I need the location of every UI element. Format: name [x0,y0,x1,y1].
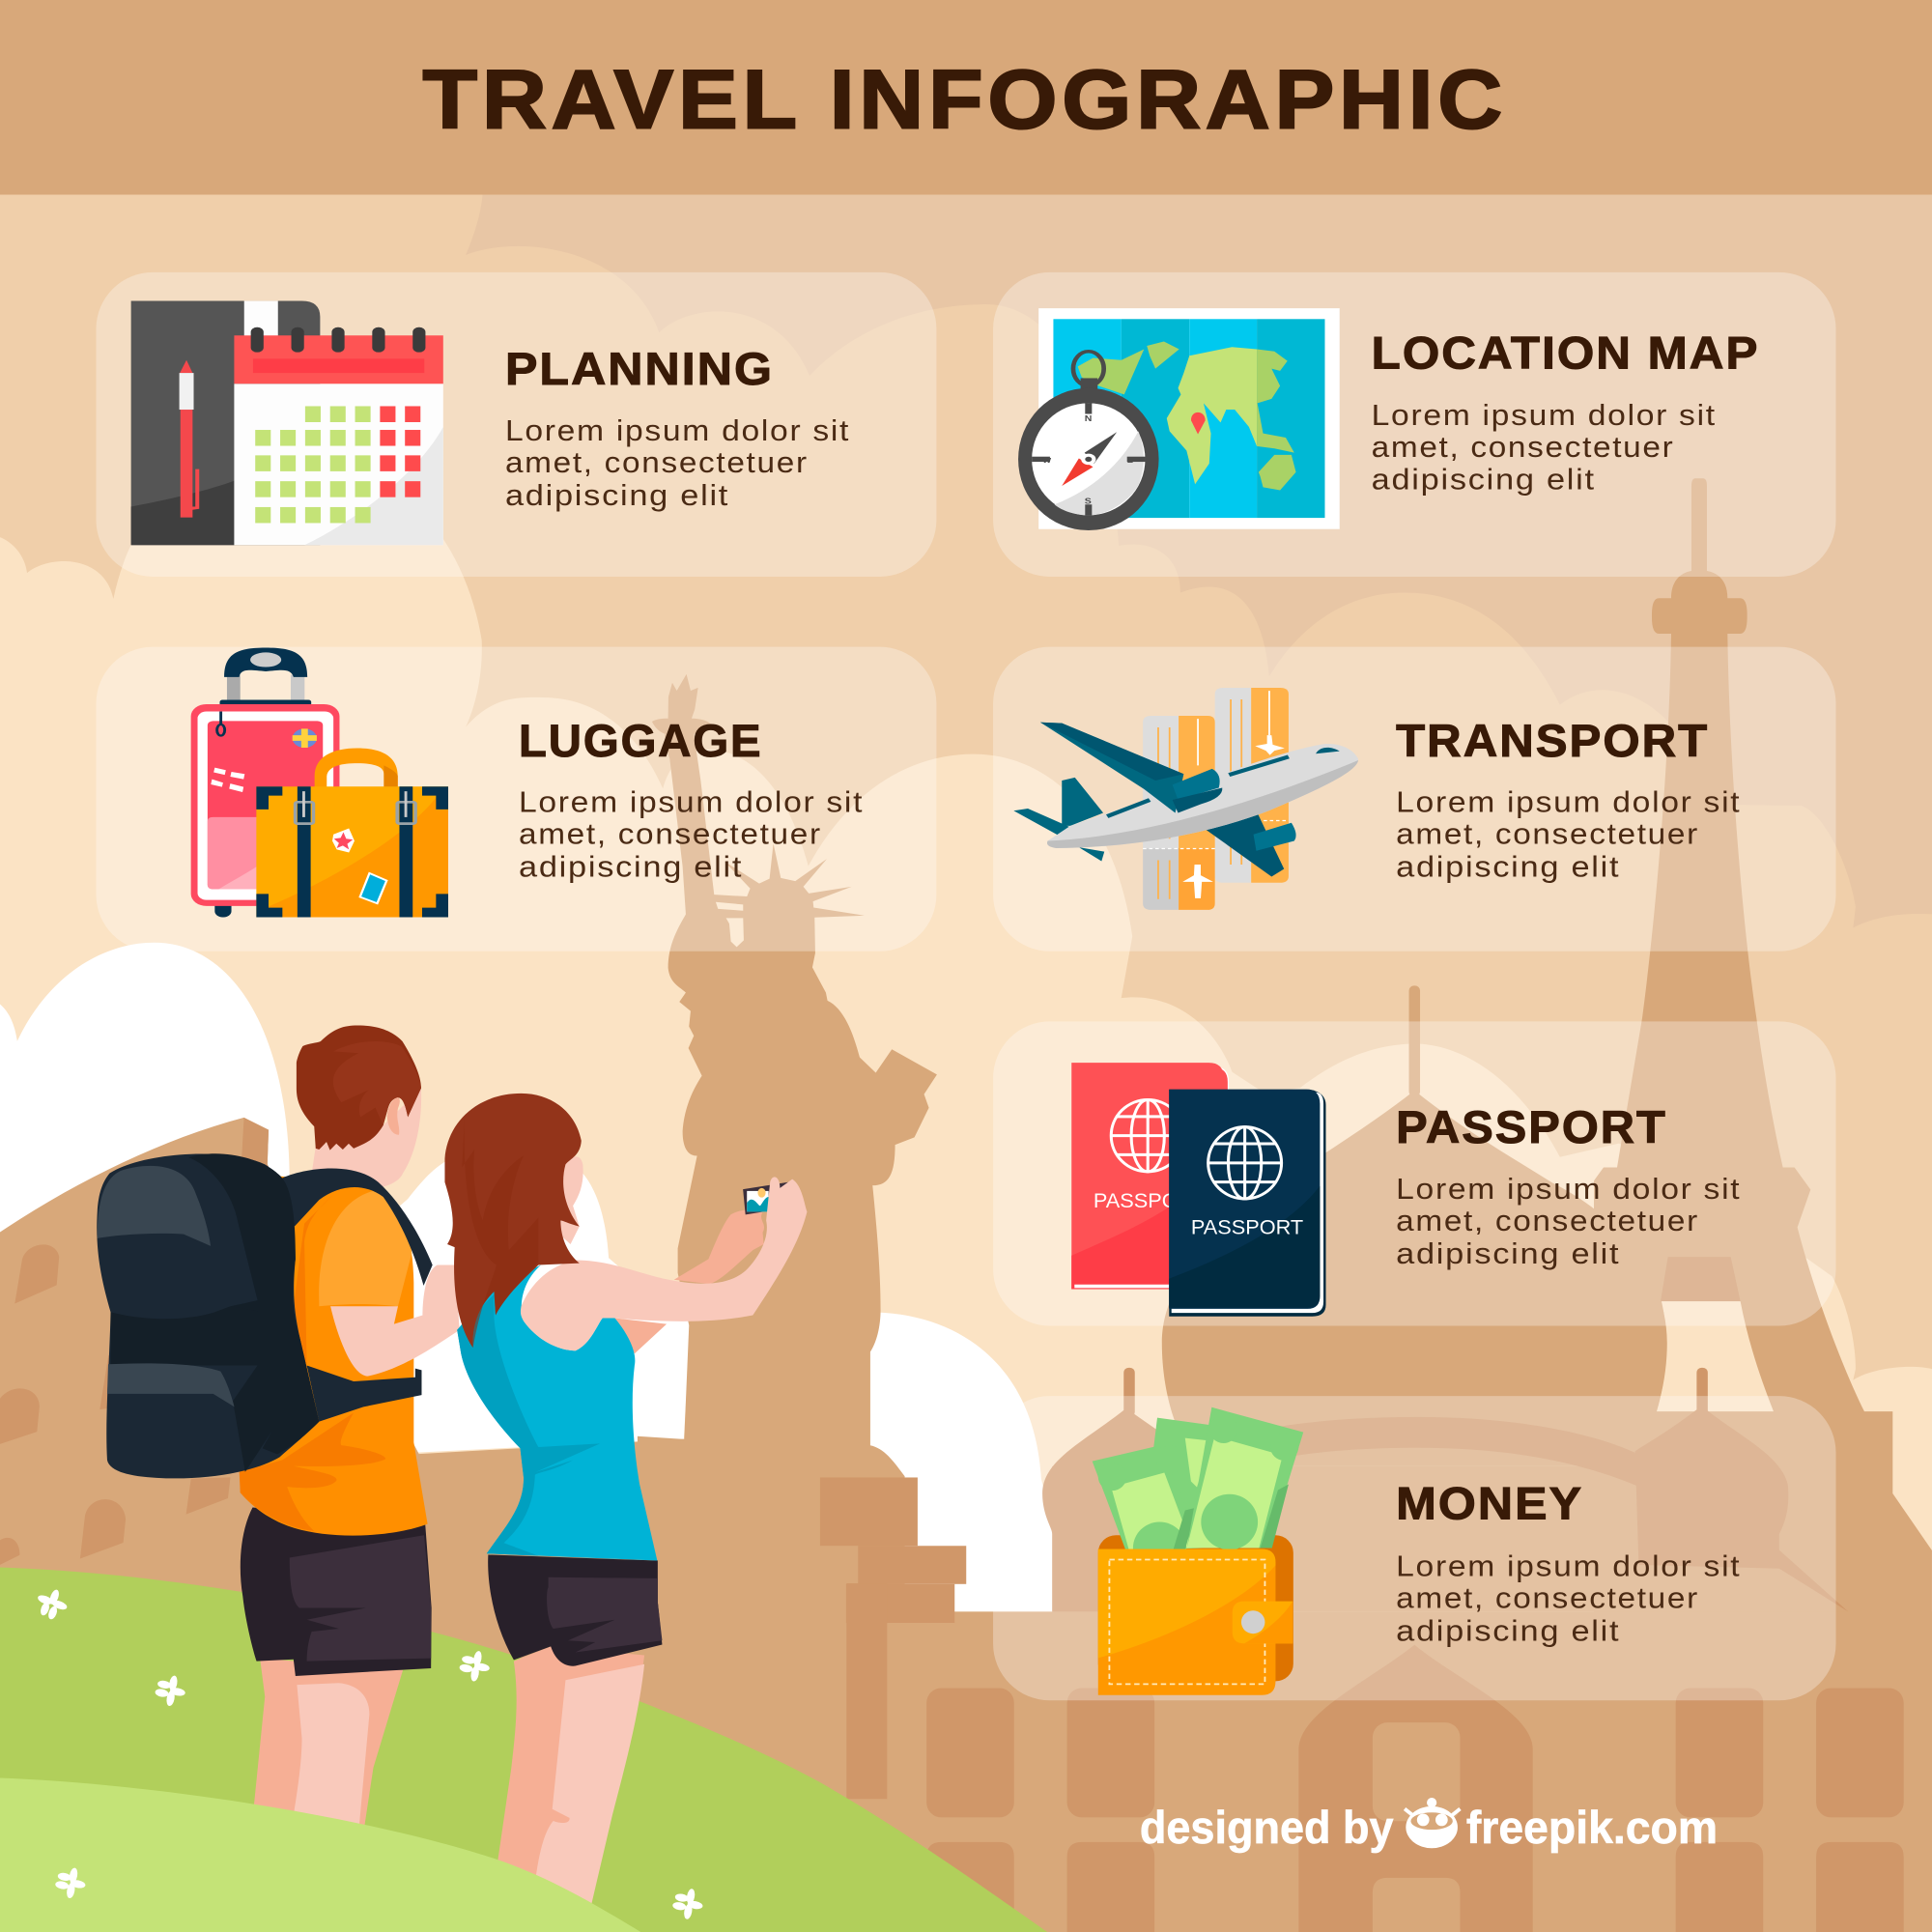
heading: luggage: LUGGAGE [519,716,763,767]
panel: location map [993,272,1836,577]
text: luggage body [519,786,864,884]
text: transport body: amet, consectetuer [1396,818,1699,851]
text: location map body: amet, consectetuer [1372,431,1674,464]
text: planning body: adipiscing elit [505,479,729,512]
colosseum hill silhouette [0,1118,887,1932]
text: luggage body: adipiscing elit [519,851,743,884]
panel: luggage [96,647,936,952]
text: money body: amet, consectetuer [1396,1582,1699,1615]
statue pedestal column [846,1583,887,1799]
icon: passports: PASSPORT [1094,1190,1206,1212]
woman [444,1094,807,1910]
text: transport body [1396,786,1741,884]
icon: passports [1071,1063,1325,1317]
panel: passport [993,1021,1836,1325]
eiffel tower silhouette [1594,478,1932,1931]
panel: transport [993,647,1836,952]
text: passport body [1396,1173,1741,1270]
icon: world map and compass [1018,308,1340,530]
taj mahal silhouette [887,985,1932,1932]
heading: passport: PASSPORT [1396,1102,1667,1153]
flowers [33,1584,705,1921]
text: planning body [505,414,850,512]
icon: airplane and tickets [1013,688,1358,910]
text: location map body [1372,399,1717,496]
icon: world map and compass: N [1085,414,1093,423]
text: passport body: adipiscing elit [1396,1237,1620,1270]
icon: passports: PASSPORT [1191,1217,1303,1239]
man [97,1025,460,1833]
front grass hill [0,1778,640,1932]
text: planning body: amet, consectetuer [505,446,809,479]
icon: world map and compass: W [1042,456,1051,465]
text: planning body: Lorem ipsum dolor sit [505,414,850,447]
icon: world map and compass: S [1085,497,1092,505]
text: transport body: adipiscing elit [1396,851,1620,884]
icon: wallet with banknotes [1093,1407,1303,1695]
text: location map body: Lorem ipsum dolor sit [1372,399,1717,432]
heading: planning: PLANNING [505,344,774,395]
text: passport body: Lorem ipsum dolor sit [1396,1173,1741,1206]
statue of liberty silhouette [638,674,966,1931]
text: location map body: adipiscing elit [1372,463,1596,496]
heading: location map: LOCATION MAP [1372,327,1759,379]
credit: designed by freepik.com: designed by [1140,1803,1394,1854]
back grass hill [0,1567,1047,1932]
text: money body: adipiscing elit [1396,1614,1620,1647]
credit: designed by freepik.com: freepik.com [1466,1803,1718,1854]
heading: money: MONEY [1396,1479,1583,1530]
text: luggage body: Lorem ipsum dolor sit [519,786,864,819]
text: money body: Lorem ipsum dolor sit [1396,1549,1741,1582]
panel: planning [96,272,936,577]
icon: suitcases [191,647,448,917]
icon: world map and compass: E [1127,456,1133,465]
text: transport body: Lorem ipsum dolor sit [1396,786,1741,819]
panel: money [993,1396,1836,1700]
heading: transport: TRANSPORT [1396,716,1709,767]
icon: notebook and calendar [131,301,443,545]
illustration: two travellers [97,1025,807,1910]
text: passport body: amet, consectetuer [1396,1205,1699,1237]
title: TRAVEL INFOGRAPHIC [423,53,1507,147]
credit: designed by freepik.com [1140,1798,1718,1854]
icon: freepik logo [1405,1798,1460,1848]
text: luggage body: amet, consectetuer [519,818,822,851]
header band [0,0,1932,195]
text: money body [1396,1549,1741,1647]
